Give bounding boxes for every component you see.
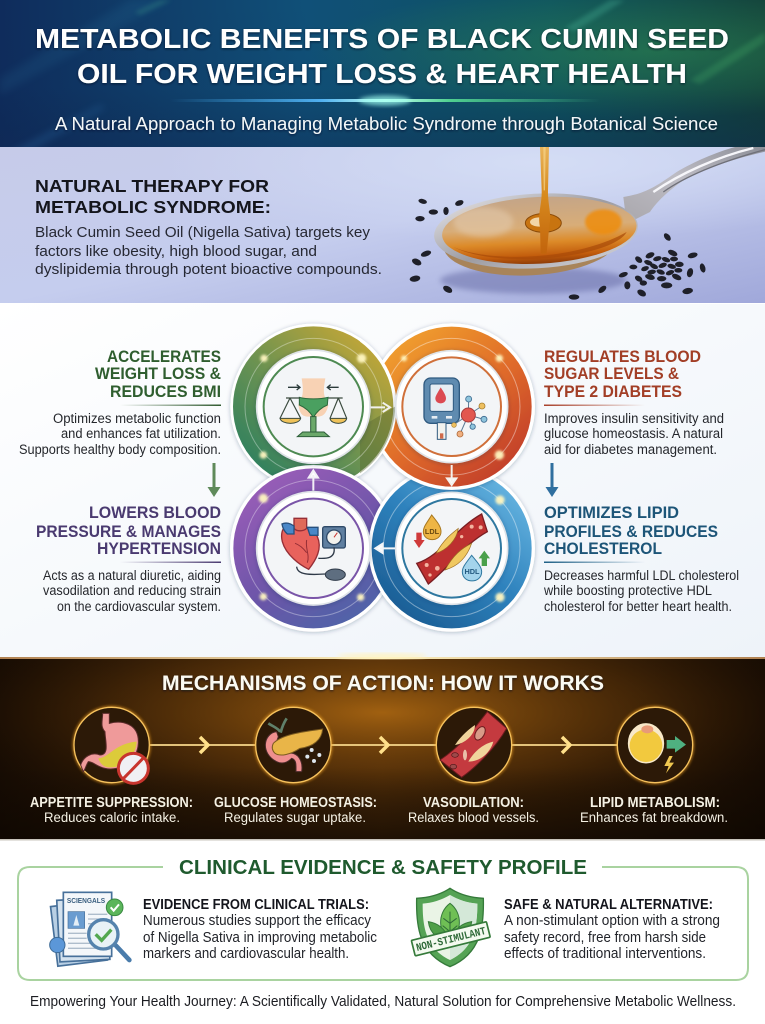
body: blood sugar: glucose homeostasis. A natural	[544, 426, 723, 441]
label: lipid metabolism: LIPID METABOLISM:	[590, 795, 720, 811]
connector line with chevrons	[150, 737, 617, 753]
heading: natural therapy: METABOLIC SYNDROME:	[35, 197, 271, 217]
text block: clinical trials: of Nigella Sativa in improving metabolic	[143, 930, 377, 946]
panel: mechanisms of action	[0, 654, 765, 840]
label: appetite suppression: APPETITE SUPPRESSION:	[30, 795, 193, 811]
text block: natural therapy body: dyslipidemia through potent bioactive compounds.	[35, 262, 382, 278]
title: METABOLIC BENEFITS OF BLACK CUMIN SEED	[35, 23, 729, 54]
label: glucose homeostasis	[214, 795, 377, 825]
heading: mechanisms: MECHANISMS OF ACTION: HOW IT WORKS	[162, 671, 604, 695]
footer tagline: Empowering Your Health Journey: A Scientifically Validated, Natural Solution for Comprehensive Metabolic Wellness.	[30, 994, 736, 1010]
icon: appetite suppression	[72, 706, 151, 784]
text block: safe alternative: SAFE & NATURAL ALTERNATIVE:	[504, 897, 713, 913]
title: OIL FOR WEIGHT LOSS & HEART HEALTH	[77, 58, 687, 89]
body: weight loss: Optimizes metabolic function	[53, 411, 221, 426]
body: weight loss	[19, 411, 221, 457]
diagram: four benefit circles	[232, 325, 533, 630]
disc: lipids icon: HDL	[464, 567, 480, 576]
text block: safe alternative: safety record, free from harsh side	[504, 930, 706, 946]
text block: weight loss	[19, 347, 221, 457]
arrow: blood sugar to lipids	[447, 465, 456, 485]
text block: clinical trials: Numerous studies support the efficacy	[143, 913, 372, 929]
subtitle: A Natural Approach to Managing Metabolic Syndrome through Botanical Science	[55, 114, 718, 134]
icon: research papers: SCIENGALS	[67, 898, 105, 905]
body: blood pressure: Acts as a natural diuretic, aiding	[43, 568, 221, 583]
heading: blood sugar	[544, 347, 701, 401]
body: blood pressure: on the cardiovascular system.	[57, 599, 221, 614]
icon: lipid metabolism	[616, 706, 694, 784]
text block: blood sugar	[544, 347, 724, 457]
ring: blood sugar	[370, 325, 533, 488]
label: vasodilation: Relaxes blood vessels.	[408, 810, 539, 825]
heading: blood sugar: TYPE 2 DIABETES	[544, 382, 682, 401]
text block: clinical trials	[143, 897, 377, 962]
icon: non-stimulant shield: NON-STIMULANT	[415, 926, 488, 955]
label: vasodilation: VASODILATION:	[423, 795, 524, 811]
header banner	[0, 0, 765, 147]
title	[36, 28, 729, 86]
heading: weight loss: WEIGHT LOSS &	[95, 364, 221, 383]
label: glucose homeostasis: Regulates sugar uptake.	[224, 810, 366, 825]
icon: vasodilation	[435, 706, 513, 784]
disc: blood sugar icon	[396, 351, 508, 463]
icon: research papers	[50, 892, 129, 966]
body: lipids	[543, 568, 739, 614]
heading: blood pressure: HYPERTENSION	[97, 539, 221, 558]
text block: natural therapy body: Black Cumin Seed Oil (Nigella Sativa) targets key	[35, 225, 371, 241]
heading: weight loss	[95, 347, 221, 401]
text block: safe alternative: effects of traditional interventions.	[504, 946, 706, 962]
text block: natural therapy body	[35, 225, 382, 278]
heading: lipids: PROFILES & REDUCES	[544, 522, 718, 541]
heading: natural therapy: NATURAL THERAPY FOR	[35, 176, 269, 196]
label: lipid metabolism: Enhances fat breakdown.	[580, 810, 728, 825]
body: lipids: while boosting protective HDL	[543, 583, 712, 598]
heading: natural therapy	[35, 176, 271, 217]
body: weight loss: Supports healthy body composition.	[19, 442, 221, 457]
arrow: blood pressure to weight loss	[309, 470, 318, 491]
disc: weight loss icon	[257, 350, 370, 463]
heading: lipids	[544, 503, 718, 558]
heading: weight loss: ACCELERATES	[107, 347, 221, 366]
heading: lipids: CHOLESTEROL	[544, 539, 662, 558]
arrow: lipids to blood pressure	[375, 544, 395, 553]
panel: natural therapy	[0, 147, 765, 303]
heading: clinical evidence: CLINICAL EVIDENCE & SAFETY PROFILE	[179, 856, 587, 879]
label: vasodilation	[408, 795, 539, 825]
label: appetite suppression	[30, 795, 193, 825]
disc: lipids icon: LDL	[425, 527, 440, 536]
body: blood pressure	[43, 568, 221, 614]
labels: mechanism names and descriptions	[30, 795, 728, 825]
body: blood sugar	[544, 411, 724, 457]
disc: blood pressure icon	[257, 492, 370, 605]
ring: weight loss	[232, 325, 395, 488]
heading: blood sugar: REGULATES BLOOD	[544, 347, 701, 366]
ring: lipids	[370, 467, 533, 630]
label: appetite suppression: Reduces caloric intake.	[44, 810, 180, 825]
label: lipid metabolism	[580, 795, 728, 825]
heading: blood sugar: SUGAR LEVELS &	[544, 364, 679, 383]
heading: blood pressure	[36, 503, 221, 558]
body: blood pressure: vasodilation and reducing strain	[43, 583, 221, 598]
label: glucose homeostasis: GLUCOSE HOMEOSTASIS:	[214, 795, 377, 811]
ring overlap: green over orange	[360, 338, 396, 476]
text block: lipids	[543, 503, 739, 614]
glowing divider line	[170, 96, 600, 106]
arrow: left column down	[208, 463, 220, 497]
text block: clinical trials: EVIDENCE FROM CLINICAL TRIALS:	[143, 897, 369, 913]
arrow: right column down	[546, 463, 558, 497]
text block: safe alternative: A non-stimulant option with a strong	[504, 913, 720, 929]
heading: blood pressure: LOWERS BLOOD	[89, 503, 221, 522]
panel: benefits	[0, 304, 765, 658]
panel: clinical evidence	[18, 856, 748, 980]
heading: lipids: OPTIMIZES LIPID	[544, 503, 679, 522]
body: blood sugar: Improves insulin sensitivity and	[544, 411, 724, 426]
text block: clinical trials: markers and cardiovascular health.	[143, 946, 349, 962]
ring: blood pressure	[232, 467, 395, 630]
disc: lipids icon	[396, 492, 508, 604]
icon: non-stimulant shield	[411, 888, 490, 967]
body: lipids: Decreases harmful LDL cholesterol	[544, 568, 739, 583]
icon: glucose homeostasis	[254, 706, 333, 784]
heading: blood pressure: PRESSURE & MANAGES	[36, 522, 221, 541]
arrow: weight loss to blood sugar	[371, 403, 390, 412]
heading: weight loss: REDUCES BMI	[110, 382, 221, 401]
text block: blood pressure	[36, 503, 221, 614]
illustration: spoon with oil and seeds	[409, 147, 765, 300]
body: weight loss: and enhances fat utilization.	[61, 426, 221, 441]
body: blood sugar: aid for diabetes management.	[544, 442, 717, 457]
text block: safe alternative	[504, 897, 720, 962]
body: lipids: cholesterol for better heart health.	[544, 599, 732, 614]
sparkles	[259, 354, 505, 602]
text block: natural therapy body: factors like obesity, high blood sugar, and	[35, 244, 317, 260]
